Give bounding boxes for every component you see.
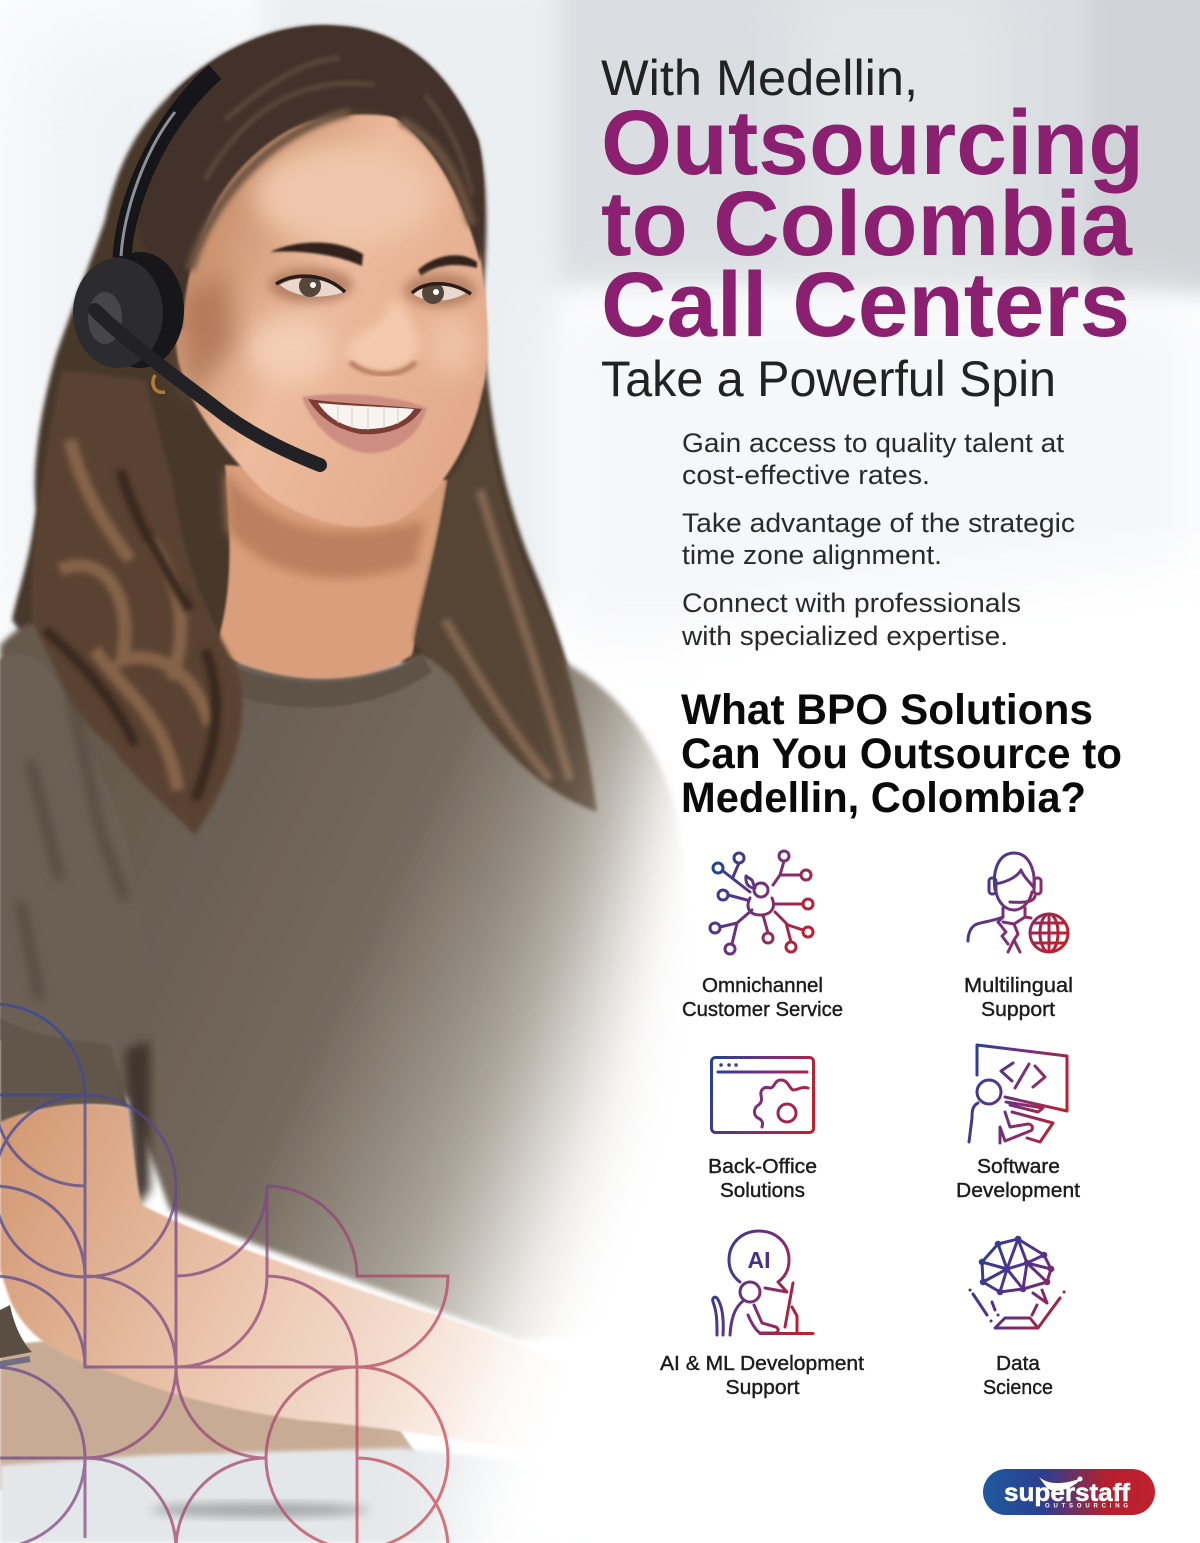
hair right (414, 385, 597, 812)
label: omnichannel: Omnichannel (702, 975, 823, 997)
benefits text: with specialized expertise. (681, 621, 1008, 651)
icon: omnichannel customer service (710, 851, 813, 954)
nose (345, 300, 420, 374)
label: omnichannel: Customer Service (682, 999, 843, 1021)
earring (153, 375, 165, 392)
label: data science: Science (983, 1377, 1053, 1399)
hair back (12, 26, 592, 835)
hair left wave highlights (60, 440, 210, 790)
geometric line pattern (0, 1004, 448, 1543)
cheek shadow (180, 270, 235, 400)
sleeve shadow folds (20, 690, 125, 1000)
desk shadow (150, 1503, 370, 1517)
eyebrows (270, 242, 363, 266)
label: back-office: Solutions (720, 1180, 805, 1202)
label: AI and ML: AI & ML Development (660, 1353, 864, 1375)
benefits text: Take advantage of the strategic (682, 508, 1075, 538)
label: data science: Data (996, 1353, 1041, 1375)
section heading: What BPO Solutions (681, 686, 1093, 734)
icon: back-office solutions (712, 1058, 814, 1132)
benefits text: cost-effective rates. (682, 460, 930, 490)
belt edge (0, 1359, 30, 1364)
icon: software development (969, 1045, 1067, 1143)
arm (0, 1104, 640, 1470)
sweater (0, 623, 700, 1340)
cuff (0, 1018, 128, 1125)
benefits text: Connect with professionals (682, 588, 1021, 618)
face highlight forehead (255, 145, 435, 245)
title: With Medellin, (601, 50, 918, 106)
white fade (460, 560, 1200, 1543)
icon: AI and ML development: AI (748, 1247, 770, 1273)
sweater under elbow (0, 1305, 32, 1358)
section heading (681, 686, 1122, 822)
face (175, 115, 488, 527)
title: Outsourcing (601, 92, 1144, 194)
label: software: Software (977, 1156, 1060, 1178)
sleeve (0, 654, 151, 1060)
label: software: Development (956, 1180, 1080, 1202)
logo: superstaff outsourcing (983, 1469, 1155, 1515)
eyes (276, 275, 471, 304)
label: multilingual: Support (981, 999, 1055, 1021)
title (601, 50, 1144, 407)
eye sockets (269, 267, 353, 303)
hair front top (130, 26, 484, 330)
mouth (302, 394, 427, 453)
label: omnichannel (682, 975, 843, 1021)
label: multilingual (964, 975, 1073, 1021)
neck (215, 465, 448, 679)
headset band (122, 72, 215, 258)
neck shadow (225, 470, 425, 578)
cheek highlights (248, 316, 332, 384)
headset mic boom (95, 310, 320, 465)
hair left wave darks (45, 470, 216, 800)
title: to Colombia (601, 173, 1133, 275)
hair highlight strands (205, 58, 472, 195)
benefits text (681, 428, 1075, 651)
icon: AI and ML development (713, 1231, 813, 1335)
section heading: Medellin, Colombia? (681, 774, 1086, 822)
hair hairline glow (190, 112, 472, 270)
desk (0, 1448, 600, 1543)
label: software (956, 1156, 1080, 1202)
icon: data science (970, 1239, 1064, 1328)
nose underside (350, 362, 416, 374)
logo: superstaff outsourcing: OUTSOURCING (1045, 1504, 1128, 1510)
section heading: Can You Outsource to (681, 730, 1122, 778)
label: AI and ML: Support (726, 1377, 800, 1399)
benefits text: Gain access to quality talent at (682, 428, 1065, 458)
pants (0, 1340, 420, 1490)
sweater collar (185, 648, 432, 708)
title: Take a Powerful Spin (601, 351, 1056, 407)
white fade wide (440, 600, 1200, 1543)
label: data science (983, 1353, 1053, 1399)
label: multilingual: Multilingual (964, 975, 1073, 997)
label: back-office: Back-Office (708, 1156, 817, 1178)
logo: superstaff outsourcing: superstaff (1004, 1479, 1131, 1507)
torso shadow (125, 1040, 150, 1210)
icon: multilingual support (968, 853, 1068, 952)
title: Call Centers (601, 254, 1130, 356)
label: back-office (708, 1156, 817, 1202)
hair left waves (31, 370, 242, 835)
benefits text: time zone alignment. (682, 540, 942, 570)
label: AI and ML (660, 1353, 864, 1399)
headset earpiece (73, 252, 184, 368)
hair right highlights (445, 490, 570, 780)
